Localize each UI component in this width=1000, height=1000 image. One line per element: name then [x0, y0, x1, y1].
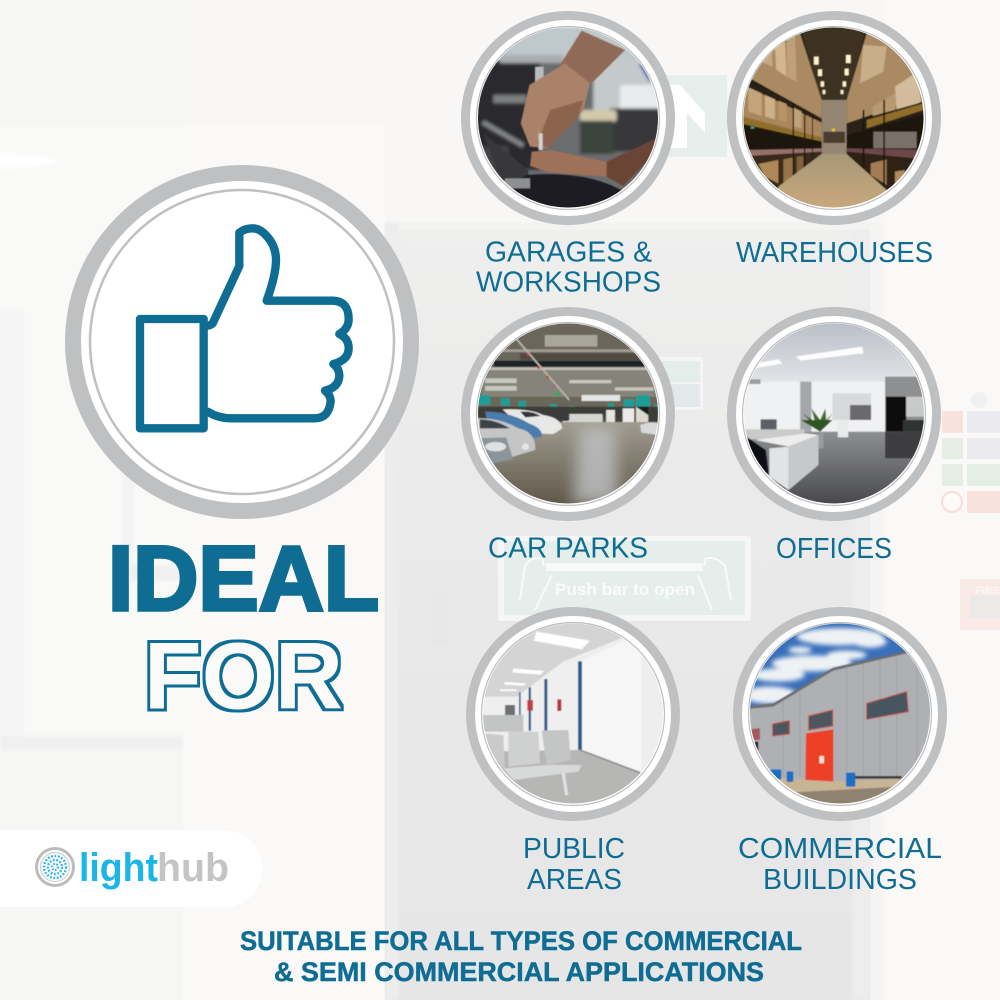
label: [523, 833, 625, 896]
photo: underground car park: [471, 320, 664, 505]
main badge: thumbs up: [65, 165, 419, 519]
logo: lighthub: [0, 830, 262, 907]
background: exit sign with arrow: [660, 75, 727, 157]
heading: IDEAL: IDEAL: [108, 528, 379, 630]
label: GARAGES &: [485, 236, 652, 268]
icon: thumbs up: [140, 228, 349, 428]
label: BUILDINGS: [763, 864, 917, 896]
wordmark: [79, 846, 229, 890]
background: push bar sign: [498, 536, 751, 621]
photo: mechanic hands on engine: [473, 27, 663, 213]
label: [476, 236, 661, 298]
background: safety notices: [942, 392, 1000, 513]
panel: garages and workshops: [461, 11, 675, 298]
panel: offices: [727, 307, 941, 565]
background: fire alarm box: FIRE: [975, 585, 1000, 597]
photo: grey industrial building with red door: [750, 624, 930, 804]
icon: light rings with dots: [36, 848, 74, 886]
caption: suitable applications: & SEMI COMMERCIAL APPLICATIONS: [274, 957, 764, 987]
caption: suitable applications: SUITABLE FOR ALL TYPES OF COMMERCIAL: [240, 926, 802, 956]
panel: car parks: [461, 307, 675, 564]
panel: commercial buildings: [733, 607, 947, 896]
label: PUBLIC: [523, 833, 625, 865]
label: WAREHOUSES: [736, 237, 933, 269]
photo: waiting area with seats: [483, 624, 663, 804]
label: WORKSHOPS: [476, 266, 661, 298]
wordmark: light: [79, 846, 158, 890]
caption: suitable applications: [240, 926, 802, 987]
panel: public areas: [466, 607, 680, 896]
panel: warehouses: [727, 11, 941, 269]
background: small green and blue sign: [655, 357, 703, 410]
label: COMMERCIAL: [738, 833, 942, 865]
label: AREAS: [527, 864, 622, 896]
photo: open plan office: [744, 324, 924, 504]
background: fire alarm box: [960, 579, 1000, 630]
label: CAR PARKS: [488, 532, 648, 564]
heading: FOR: FOR: [144, 624, 343, 730]
label: [738, 833, 942, 896]
label: OFFICES: [776, 533, 892, 565]
wordmark: hub: [157, 846, 229, 890]
photo: warehouse aisle: [737, 27, 930, 210]
background: push bar sign: Push bar to open: [555, 580, 695, 599]
